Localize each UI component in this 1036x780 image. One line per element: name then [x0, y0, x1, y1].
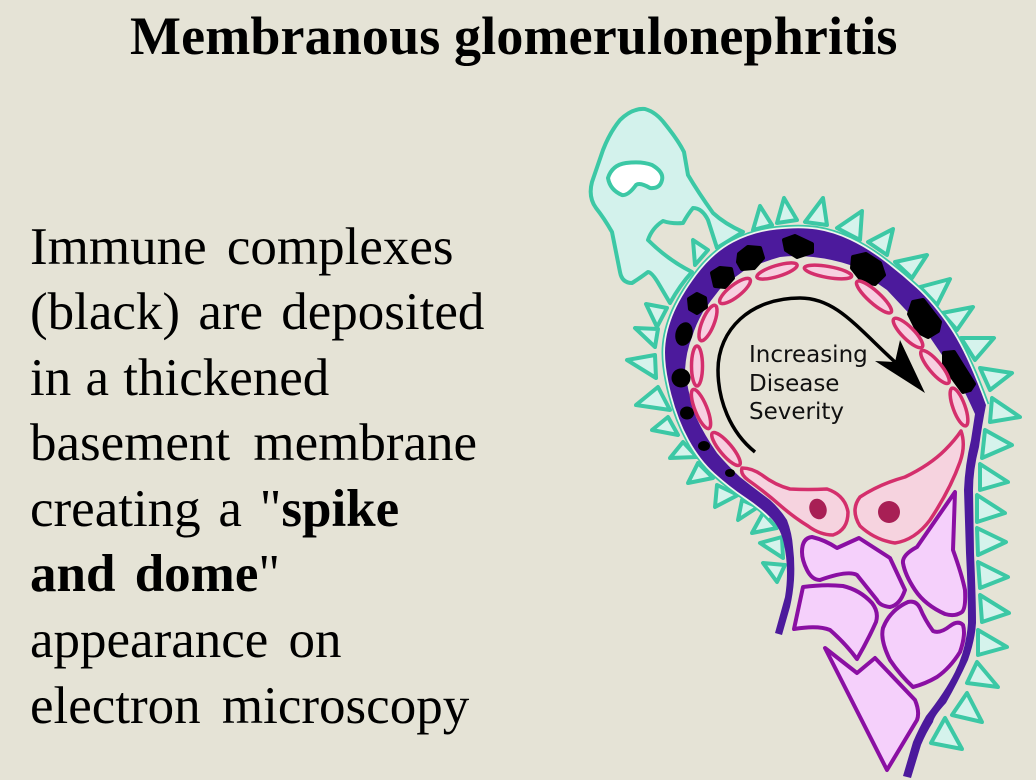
label: increasing disease severity: Increasing — [749, 342, 868, 368]
text block: description — [30, 218, 484, 735]
text block: description: appearance on — [30, 611, 342, 669]
endothelial cell left with nucleus — [742, 468, 848, 535]
membrane halo — [665, 228, 986, 517]
podocyte foot-process outer line — [665, 228, 986, 517]
title: Membranous glomerulonephritis — [130, 6, 898, 66]
text block: description: creating a "spike — [30, 480, 399, 538]
text block: description: electron microscopy — [30, 677, 470, 735]
text block: description: in a thickened — [30, 349, 329, 407]
mesangial cells — [794, 492, 965, 770]
immune complex deposits — [672, 236, 974, 477]
label: increasing disease severity: Disease — [749, 371, 839, 397]
label: increasing disease severity: Severity — [749, 399, 844, 425]
endothelial cell right with nucleus — [855, 431, 963, 543]
label: increasing disease severity — [749, 342, 868, 425]
glomerular basement membrane — [665, 228, 986, 778]
endothelial cells — [688, 260, 971, 469]
arrow: increasing disease severity — [718, 298, 925, 452]
diagram: glomerular capillary loop — [591, 109, 1020, 778]
text block: description: (black) are deposited — [30, 283, 484, 341]
foot-process spikes — [627, 198, 1020, 749]
podocyte cell body — [591, 109, 743, 303]
text block: description: and dome" — [30, 545, 280, 603]
text block: description: basement membrane — [30, 414, 477, 472]
text block: description: Immune complexes — [30, 218, 454, 276]
podocyte nucleus hole — [608, 162, 662, 195]
